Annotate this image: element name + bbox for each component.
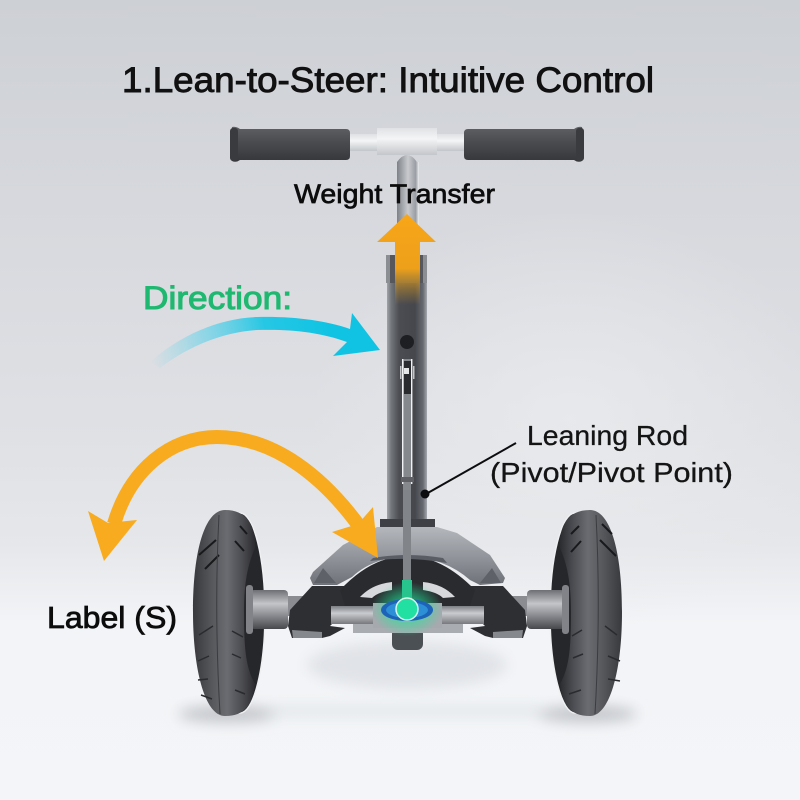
arrow: weight transfer	[377, 214, 436, 305]
deck hull	[310, 527, 505, 585]
label: direction: Direction:	[143, 280, 292, 316]
left and right axle arms	[286, 586, 530, 638]
floor shadows	[178, 641, 637, 722]
rod over deck	[403, 490, 411, 580]
main post	[386, 255, 427, 521]
arrow: lean double-headed	[88, 437, 378, 561]
title: 1.Lean-to-Steer: Intuitive Control	[122, 61, 654, 100]
leader line: leaning rod	[420, 443, 516, 498]
label: leaning rod	[490, 420, 733, 488]
lean rod	[400, 359, 414, 564]
scooter illustration	[193, 127, 622, 716]
handlebar	[230, 127, 584, 162]
inner mechanism	[331, 556, 484, 628]
arrow: direction	[150, 313, 380, 368]
label: leaning rod: Leaning Rod	[527, 420, 688, 451]
left wheel	[193, 510, 265, 716]
green pivot indicator	[371, 580, 443, 636]
label: weight transfer: Weight Transfer	[294, 179, 495, 209]
label: S: Label (S)	[47, 600, 177, 635]
upper stem	[397, 155, 419, 230]
label: leaning rod: (Pivot/Pivot Point)	[490, 457, 733, 488]
deck collar	[380, 519, 435, 528]
right wheel	[550, 510, 622, 716]
lower pivot stub	[392, 628, 423, 650]
lower plate	[353, 623, 463, 633]
wheel hubs	[246, 585, 569, 634]
